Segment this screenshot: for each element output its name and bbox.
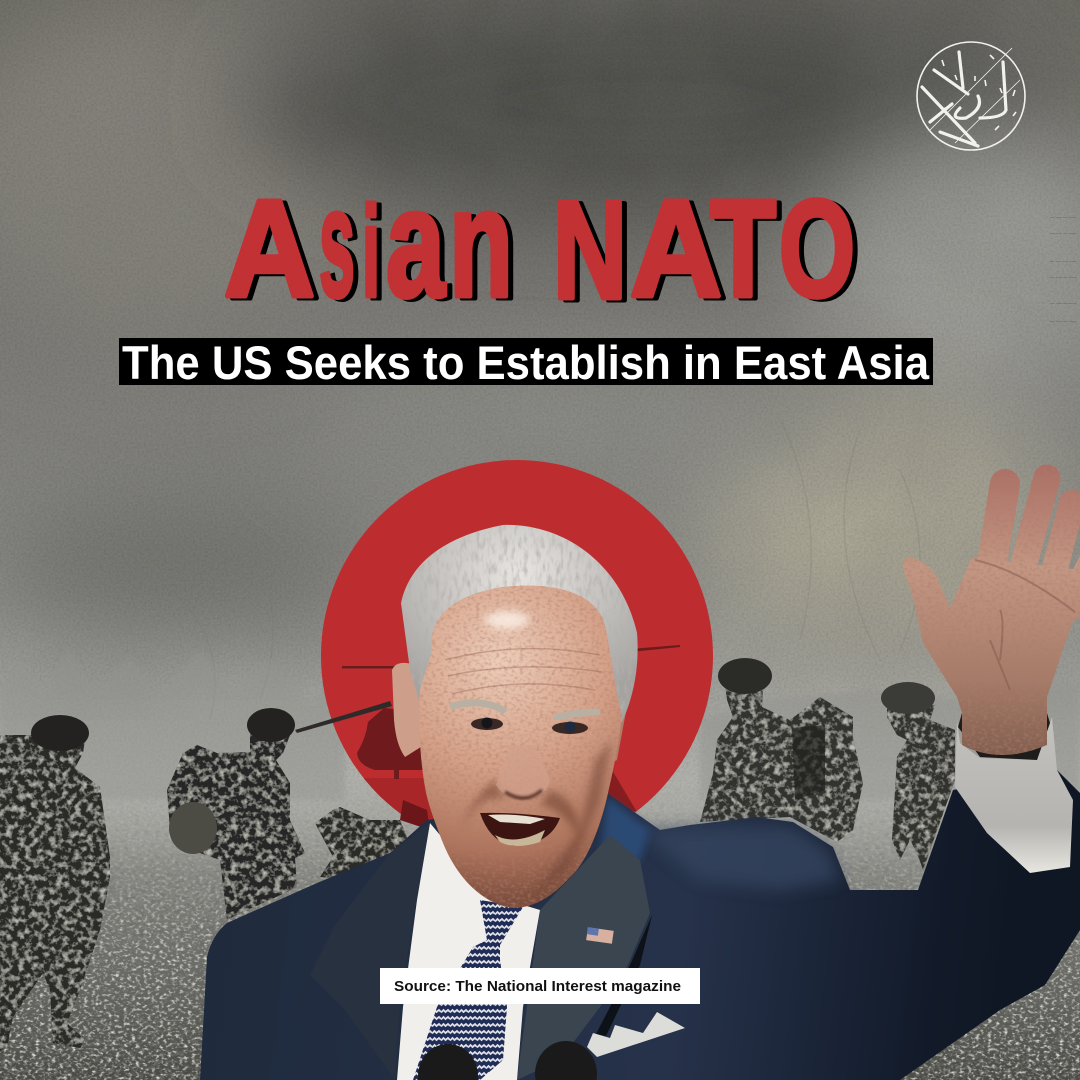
source label: Source: The National Interest magazine (394, 978, 681, 995)
title: A (635, 174, 727, 328)
helicopter silhouette (295, 645, 680, 820)
shirt cuff (955, 717, 1073, 873)
palm creases (975, 560, 1075, 690)
right lapel (517, 835, 650, 1080)
ear right (606, 690, 630, 766)
tie (413, 900, 523, 1080)
jacket sheen: right shoulder (640, 826, 840, 890)
source label (380, 968, 700, 1004)
decorative small text column: ـــــ ـــ ــــ ـــ (1049, 214, 1077, 220)
shirt (397, 823, 540, 1080)
waving hand (903, 478, 1080, 755)
face (419, 586, 622, 908)
title: s (324, 159, 360, 331)
lapel dark notch right (596, 915, 652, 1036)
background: battlefield ground (0, 780, 1080, 1080)
soldier: far right (881, 682, 955, 870)
brows (453, 703, 597, 717)
soldier: second from left (167, 708, 305, 920)
title: O (784, 174, 860, 328)
forehead wrinkles (445, 649, 602, 694)
soldier: far left (0, 715, 110, 1052)
title: a (391, 159, 451, 331)
red circle (321, 460, 713, 852)
title: n (454, 159, 518, 331)
title: a (386, 157, 446, 329)
title: N (553, 171, 627, 328)
suit jacket (200, 770, 1080, 1080)
title: s (319, 157, 355, 329)
portrait: man in navy suit (200, 478, 1080, 1080)
flag pin (586, 927, 614, 944)
background: faint arabesque lines (170, 420, 920, 720)
forehead highlight (485, 611, 529, 629)
watch band (958, 713, 1050, 760)
hair (401, 525, 638, 722)
decorative small text column: ـــــ ـــ ــــ ـــ (1049, 300, 1077, 306)
pocket square (587, 1012, 685, 1057)
mouth (480, 813, 560, 846)
logo: calligraphy roundel (917, 42, 1025, 150)
title: T (710, 172, 776, 326)
title: O (779, 172, 855, 326)
soldier: right with backpack (700, 658, 863, 842)
microphones (418, 1041, 597, 1080)
title: i (362, 181, 380, 324)
ear left (392, 663, 428, 757)
title: i (367, 183, 385, 326)
title: A (630, 172, 722, 326)
title: T (715, 174, 781, 328)
nose (496, 745, 550, 798)
nostril shadow (505, 790, 542, 798)
soldier: crouching (315, 807, 412, 878)
decorative small text column (1049, 214, 1077, 324)
face shading right (530, 740, 612, 900)
title: N (558, 173, 632, 330)
jacket sheen: neck blue (600, 797, 650, 870)
face shading nose and cheeks (462, 780, 580, 840)
title: n (449, 157, 513, 329)
subtitle bar: The US Seeks to Establish in East Asia (122, 336, 930, 389)
crouching soldier red-tinted pack (400, 800, 430, 830)
background: misty tree line (0, 650, 1080, 800)
title: A (229, 174, 320, 328)
left lapel (310, 823, 430, 1080)
decorative small text column: ـــــ ـــ ــــ ـــ (1049, 230, 1077, 236)
decorative small text column: ـــــ ـــ ــــ ـــ (1049, 318, 1077, 324)
title: A (224, 172, 315, 326)
title (224, 157, 860, 331)
decorative small text column: ـــــ ـــ ــــ ـــ (1049, 258, 1077, 264)
decorative small text column: ـــــ ـــ ــــ ـــ (1049, 274, 1077, 280)
eyes (471, 718, 588, 734)
